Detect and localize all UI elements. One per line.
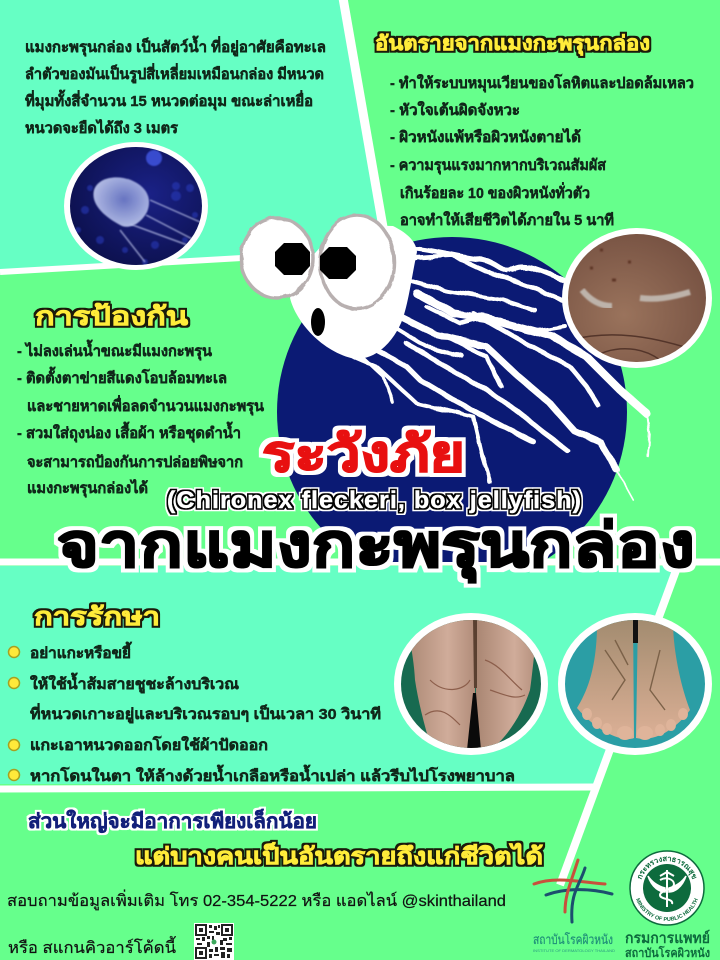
photo: skin lesion [562, 228, 712, 368]
text: contact line: สอบถามข้อมูลเพิ่มเติม โทร 02-354-5222 หรือ แอดไลน์ @skinthailand [7, 889, 506, 911]
panel: prevention green area [0, 257, 300, 560]
text block: treatment list: หากโดนในตา ให้ล้างด้วยน้ำเกลือหรือน้ำเปล่า แล้วรีบไปโรงพยาบาล [30, 764, 515, 785]
title: species name: (Chironex fleckeri, box jellyfish) [167, 487, 582, 514]
text block: danger list: - ความรุนแรงมากหากบริเวณสัมผัส [390, 156, 607, 175]
text block: danger list: เกินร้อยละ 10 ของผิวหนังทั่วตัว [400, 182, 590, 202]
icon: QR code [194, 923, 234, 960]
text block: intro description: หนวดจะยืดได้ถึง 3 เมตร [25, 118, 179, 137]
text block: prevention list: - ไม่ลงเล่นน้ำขณะมีแมงกะพรุน [17, 339, 213, 361]
text block: danger list: อาจทำให้เสียชีวิตได้ภายใน 5 นาที [400, 210, 614, 229]
heading: prevention: การป้องกัน [35, 301, 188, 331]
text block: prevention list: และชายหาดเพื่อลดจำนวนแมงกะพรุน [27, 395, 265, 416]
text block: danger list: - ทำให้ระบบหมุนเวียนของโลหิตและปอดล้มเหลว [390, 73, 694, 93]
text block: treatment list: อย่าแกะหรือขยี้ [30, 641, 132, 662]
photo: box jellyfish [60, 140, 210, 275]
divider band: upper horizontal [0, 257, 260, 272]
logo: Institute of Dermatology [533, 860, 615, 953]
seal Thai caption: กระทรวงสาธารณสุข [638, 856, 696, 880]
text block: prevention list: จะสามารถป้องกันการปล่อยพิษจาก [27, 453, 243, 471]
tentacles [353, 248, 649, 500]
bell [290, 225, 417, 359]
text block: danger list [390, 73, 694, 229]
left eye [241, 218, 313, 298]
icons: yellow bullets [8, 646, 20, 780]
divider band: lower horizontal [0, 787, 598, 789]
logo: Ministry of Public Health [629, 850, 705, 926]
logo mark [534, 860, 612, 922]
text: scan QR prompt: หรือ สแกนคิวอาร์โค้ดนี้ [8, 936, 176, 957]
text block: prevention list: - สวมใส่ถุงน่อง เสื้อผ้า หรือชุดดำน้ำ [17, 421, 241, 443]
logo name: สถาบันโรคผิวหนัง [533, 932, 613, 947]
text block: danger list: - ผิวหนังแพ้หรือผิวหนังตายได้ [390, 127, 581, 146]
right eye [320, 215, 394, 309]
divider band: top diagonal [343, 0, 387, 250]
text block: prevention list: แมงกะพรุนกล่องได้ [27, 478, 148, 498]
text block: intro description [25, 35, 326, 137]
text block: intro description: แมงกะพรุนกล่อง เป็นสัตว์น้ำ ที่อยู่อาศัยคือทะเล [25, 35, 326, 57]
title: beware: ระวังภัย [262, 426, 465, 482]
text: institute name: สถาบันโรคผิวหนัง [625, 945, 710, 960]
divider band: lower diagonal [560, 565, 678, 885]
callout: some may be life threatening: แต่บางคนเป็นอันตรายถึงแก่ชีวิตได้ [135, 841, 543, 869]
heading: danger: อันตรายจากแมงกะพรุนกล่อง [375, 33, 650, 56]
text block: prevention list: - ติดตั้งตาข่ายสีแดงโอบล้อมทะเล [17, 366, 227, 387]
panel: intro teal area [0, 0, 388, 270]
logo English name: INSTITUTE OF DERMATOLOGY THAILAND [533, 948, 615, 953]
photo: knees [394, 613, 550, 755]
title: main heading: จากแมงกะพรุนกล่อง [57, 512, 695, 583]
heading: treatment: การรักษา [34, 603, 160, 631]
illustration: cartoon jellyfish [241, 215, 649, 500]
text block: treatment list: แกะเอาหนวดออกโดยใช้ผ้าปัดออก [30, 735, 268, 754]
divider band: middle horizontal [0, 558, 720, 566]
mouth [311, 308, 325, 336]
text block: treatment list: ให้ใช้น้ำส้มสายชูชะล้างบริเวณ [30, 672, 239, 694]
text block: treatment list [30, 641, 515, 785]
text block: treatment list: ที่หนวดเกาะอยู่และบริเวณรอบๆ เป็นเวลา 30 วินาที [30, 703, 381, 724]
left pupil [275, 243, 310, 275]
text block: intro description: ที่มุมทั้งสี่จำนวน 15 หนวดต่อมุม ขณะล่าเหยื่อ [25, 89, 313, 111]
illustration: navy circle behind jellyfish [277, 237, 627, 587]
panel: treatment teal area [0, 566, 675, 784]
text block: intro description: ลำตัวของมันเป็นรูปสี่เหลี่ยมเหมือนกล่อง มีหนวด [25, 63, 324, 84]
right pupil [320, 247, 356, 279]
callout: most have mild symptoms: ส่วนใหญ่จะมีอาการเพียงเล็กน้อย [28, 808, 317, 833]
text block: danger list: - หัวใจเต้นผิดจังหวะ [390, 101, 520, 119]
text: department name: กรมการแพทย์ [625, 929, 710, 947]
photo: feet [558, 613, 713, 755]
text block: prevention list [17, 339, 265, 498]
seal English caption: MINISTRY OF PUBLIC HEALTH [636, 898, 698, 921]
